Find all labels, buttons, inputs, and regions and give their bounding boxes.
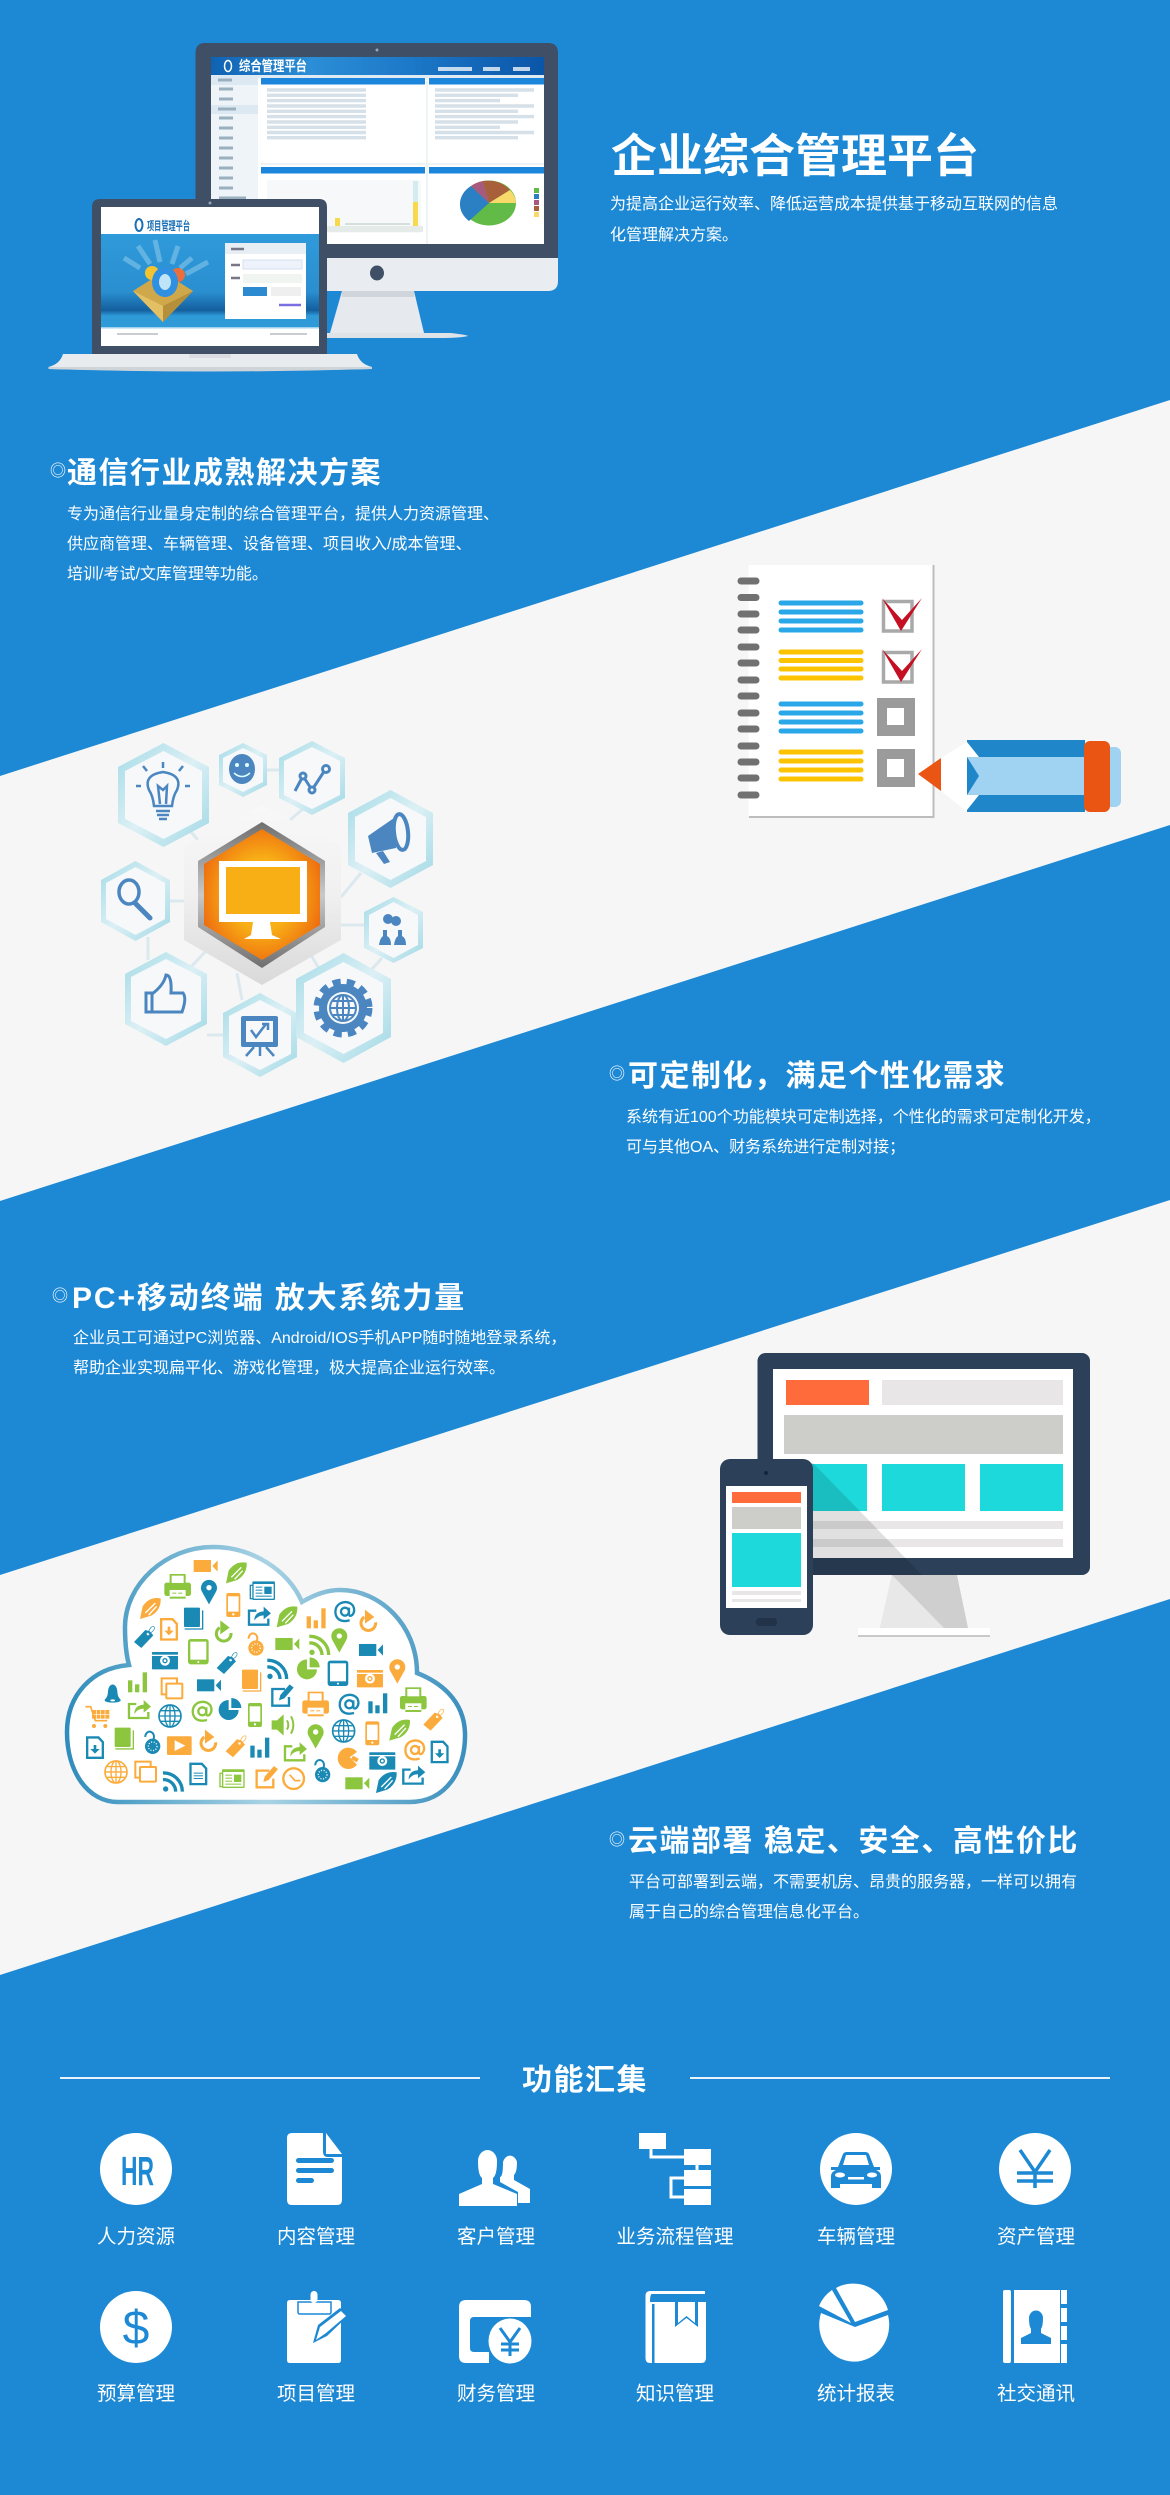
desktop monitor bbox=[196, 43, 558, 338]
description bbox=[67, 505, 499, 583]
hex: megaphone bbox=[348, 790, 433, 888]
description bbox=[73, 1329, 566, 1377]
empty boxes bbox=[877, 698, 915, 787]
section: customisation text bbox=[609, 1060, 1101, 1156]
laptop login box bbox=[225, 243, 306, 319]
laptop login logo bbox=[136, 218, 190, 233]
monitor bbox=[758, 1353, 1090, 1575]
icon: HR: HR bbox=[121, 2148, 154, 2194]
hex: light bulb bbox=[118, 743, 209, 847]
icon: budget dollar: $ bbox=[123, 2302, 149, 2355]
pencil bbox=[918, 740, 1121, 812]
description: 属于自己的综合管理信息化平台。 bbox=[629, 1903, 869, 1921]
laptop box illustration bbox=[124, 240, 208, 322]
heading bullet: ◎ bbox=[609, 1831, 625, 1849]
description: 供应商管理、车辆管理、设备管理、项目收入/成本管理、 bbox=[67, 534, 471, 553]
description: 化管理解决方案。 bbox=[610, 226, 738, 244]
label: assets: 资产管理 bbox=[997, 2226, 1075, 2248]
hex: line chart bbox=[279, 741, 345, 815]
spiral rings bbox=[741, 581, 756, 795]
icon: knowledge book bbox=[646, 2291, 706, 2363]
illustration: cloud of app icons bbox=[67, 1547, 465, 1802]
description: 为提高企业运行效率、降低运营成本提供基于移动互联网的信息 bbox=[610, 195, 1058, 213]
section: platform title bbox=[610, 130, 1058, 244]
notebook page bbox=[748, 565, 934, 818]
illustration: notebook checklist and pencil bbox=[741, 565, 1121, 818]
description: 培训/考试/文库管理等功能。 bbox=[67, 565, 268, 583]
icon: finance wallet bbox=[459, 2300, 532, 2364]
laptop footer lines bbox=[117, 333, 307, 335]
description bbox=[610, 195, 1058, 244]
monitor app header bbox=[211, 57, 544, 78]
monitor bar chart bbox=[267, 180, 423, 233]
icon: budget dollar bbox=[100, 2291, 172, 2363]
section: telecom solution text bbox=[50, 457, 499, 583]
section heading with rules: 功能汇集 bbox=[522, 2064, 648, 2097]
connector lines bbox=[148, 770, 382, 1035]
icon: assets yen bbox=[999, 2133, 1071, 2205]
label: social: 社交通讯 bbox=[997, 2383, 1075, 2405]
section: cloud deployment text bbox=[609, 1825, 1079, 1921]
label: vehicle: 车辆管理 bbox=[817, 2226, 895, 2248]
icon: monitor bbox=[219, 861, 307, 939]
description bbox=[626, 1108, 1101, 1156]
illustration: desktop monitor and laptop bbox=[48, 43, 558, 372]
monitor pie chart bbox=[460, 180, 539, 226]
phone cast shadow bbox=[790, 1459, 922, 1575]
monitor app header: 综合管理平台 bbox=[239, 58, 307, 74]
center hexagon bbox=[184, 805, 341, 985]
label: workflow: 业务流程管理 bbox=[616, 2226, 734, 2248]
checklist lines bbox=[781, 603, 861, 779]
description: 企业员工可通过PC浏览器、Android/IOS手机APP随时随地登录系统， bbox=[73, 1329, 566, 1347]
hex: thumbs up bbox=[125, 952, 207, 1046]
heading bullet: ◎ bbox=[52, 1287, 68, 1305]
icon: customers bbox=[459, 2150, 530, 2206]
cloud outline bbox=[67, 1547, 465, 1802]
title: 企业综合管理平台 bbox=[611, 130, 979, 182]
label: budget: 预算管理 bbox=[97, 2383, 175, 2405]
heading bullet: ◎ bbox=[609, 1065, 625, 1083]
icon: social contact book bbox=[1003, 2290, 1067, 2363]
laptop bbox=[48, 199, 372, 372]
checked boxes bbox=[882, 598, 922, 682]
diagonal light band 2 bbox=[0, 1200, 1170, 1975]
label: HR: 人力资源 bbox=[97, 2226, 175, 2248]
icon: project clipboard bbox=[287, 2291, 349, 2363]
icon: workflow bbox=[639, 2133, 711, 2205]
diagonal light band 1 bbox=[0, 400, 1170, 1201]
phone bbox=[720, 1459, 813, 1635]
monitor blurred text lines bbox=[267, 90, 366, 138]
hex: smiley bbox=[219, 743, 267, 797]
section: feature summary bbox=[60, 2064, 1110, 2405]
monitor panel title bars bbox=[261, 78, 544, 244]
hex: magnifier bbox=[101, 861, 170, 941]
illustration: hexagon function diagram bbox=[101, 741, 433, 1077]
heading: 通信行业成熟解决方案 bbox=[67, 457, 382, 490]
label: finance: 财务管理 bbox=[457, 2383, 535, 2405]
monitor sidebar bbox=[211, 76, 258, 244]
icon: HR bbox=[100, 2133, 172, 2205]
heading bullet: ◎ bbox=[50, 462, 66, 480]
hex: people bbox=[364, 897, 423, 963]
heading: 云端部署 稳定、安全、高性价比 bbox=[628, 1825, 1079, 1858]
laptop login logo: 项目管理平台 bbox=[147, 218, 190, 233]
icon: statistics pie bbox=[819, 2284, 889, 2362]
description: 帮助企业实现扁平化、游戏化管理，极大提高企业运行效率。 bbox=[73, 1359, 505, 1377]
heading: 可定制化，满足个性化需求 bbox=[628, 1060, 1006, 1093]
description: 平台可部署到云端，不需要机房、昂贵的服务器，一样可以拥有 bbox=[629, 1873, 1077, 1891]
description: 可与其他OA、财务系统进行定制对接； bbox=[626, 1138, 905, 1156]
monitor stand bbox=[858, 1575, 990, 1637]
icon: content document bbox=[287, 2133, 342, 2205]
description: 专为通信行业量身定制的综合管理平台，提供人力资源管理、 bbox=[67, 505, 499, 523]
description: 系统有近100个功能模块可定制选择，个性化的需求可定制化开发， bbox=[626, 1108, 1101, 1126]
label: statistics: 统计报表 bbox=[817, 2383, 895, 2405]
heading: PC+移动终端 放大系统力量 bbox=[72, 1282, 466, 1315]
label: project: 项目管理 bbox=[277, 2383, 355, 2405]
hex: presentation board bbox=[223, 993, 297, 1077]
label: content: 内容管理 bbox=[277, 2226, 355, 2248]
label: customers: 客户管理 bbox=[457, 2226, 535, 2248]
label: knowledge: 知识管理 bbox=[636, 2383, 714, 2405]
description bbox=[629, 1873, 1077, 1921]
hex: gear globe bbox=[296, 953, 391, 1063]
section: PC and mobile text bbox=[52, 1282, 566, 1377]
cloud icons bbox=[85, 1560, 449, 1793]
illustration: monitor and phone bbox=[720, 1353, 1090, 1637]
laptop blue banner bbox=[101, 234, 319, 327]
icon: vehicle bbox=[820, 2133, 892, 2205]
